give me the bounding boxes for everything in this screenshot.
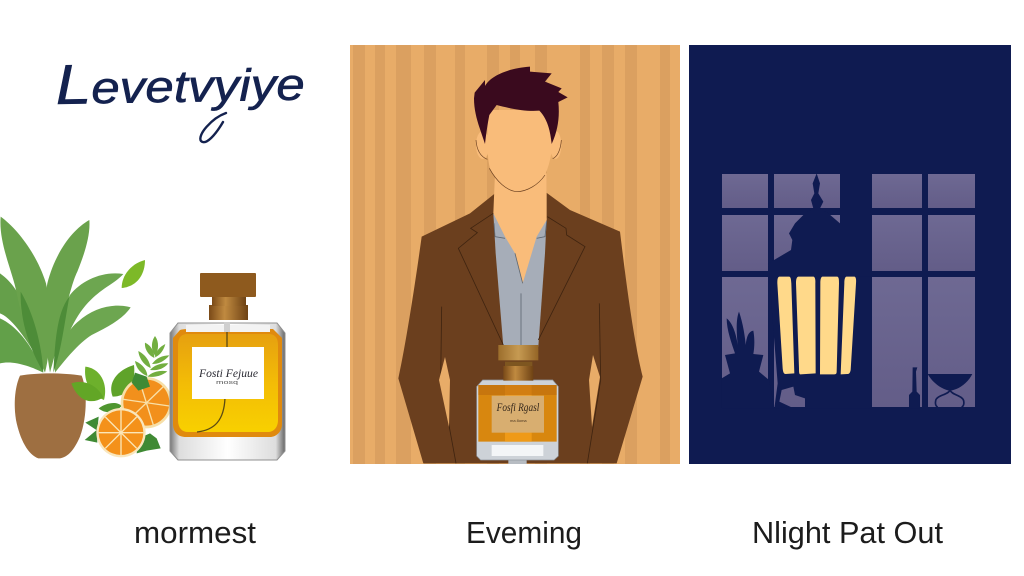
hair <box>474 67 568 144</box>
ears <box>476 131 489 159</box>
person <box>398 67 643 463</box>
label <box>492 396 544 433</box>
title <box>55 49 305 142</box>
label: Fosfi Rgasl <box>496 402 539 414</box>
window panes <box>722 174 975 407</box>
arm gaps <box>439 355 600 427</box>
icon: potted plant <box>0 217 145 458</box>
label: night column: Nlight Pat Out <box>752 515 943 550</box>
silhouette: hourglass <box>928 374 972 407</box>
illustration: plant, citrus and perfume bottle <box>0 217 285 460</box>
lantern <box>722 173 972 408</box>
fern sprig <box>135 336 169 377</box>
lantern glass <box>777 277 856 374</box>
bottle label: mosq <box>216 380 238 386</box>
neck <box>493 173 547 283</box>
bottle label: Fosti Fejuue <box>198 366 259 380</box>
panel: evening <box>350 45 680 464</box>
face <box>487 110 553 192</box>
icon: orange slices and leaves <box>71 336 172 457</box>
lapels <box>441 213 601 463</box>
icon: flower pot <box>15 373 86 458</box>
icon: perfume bottle <box>170 273 285 460</box>
label: evening column: Eveming <box>466 515 582 550</box>
label: morning column: mormest <box>134 515 256 550</box>
panel: night <box>689 45 1011 464</box>
bottle label <box>192 347 264 399</box>
label: ma 8oma <box>510 418 527 423</box>
silhouette: pot and plant <box>722 312 774 408</box>
jacket <box>398 192 643 463</box>
title: Levetvyiye <box>55 49 305 116</box>
silhouette: bottle <box>909 367 920 408</box>
cap <box>498 345 538 360</box>
icon: perfume bottle small <box>477 345 558 464</box>
shirt <box>493 213 547 347</box>
bottle cap <box>200 273 256 297</box>
lantern silhouette <box>768 173 872 408</box>
